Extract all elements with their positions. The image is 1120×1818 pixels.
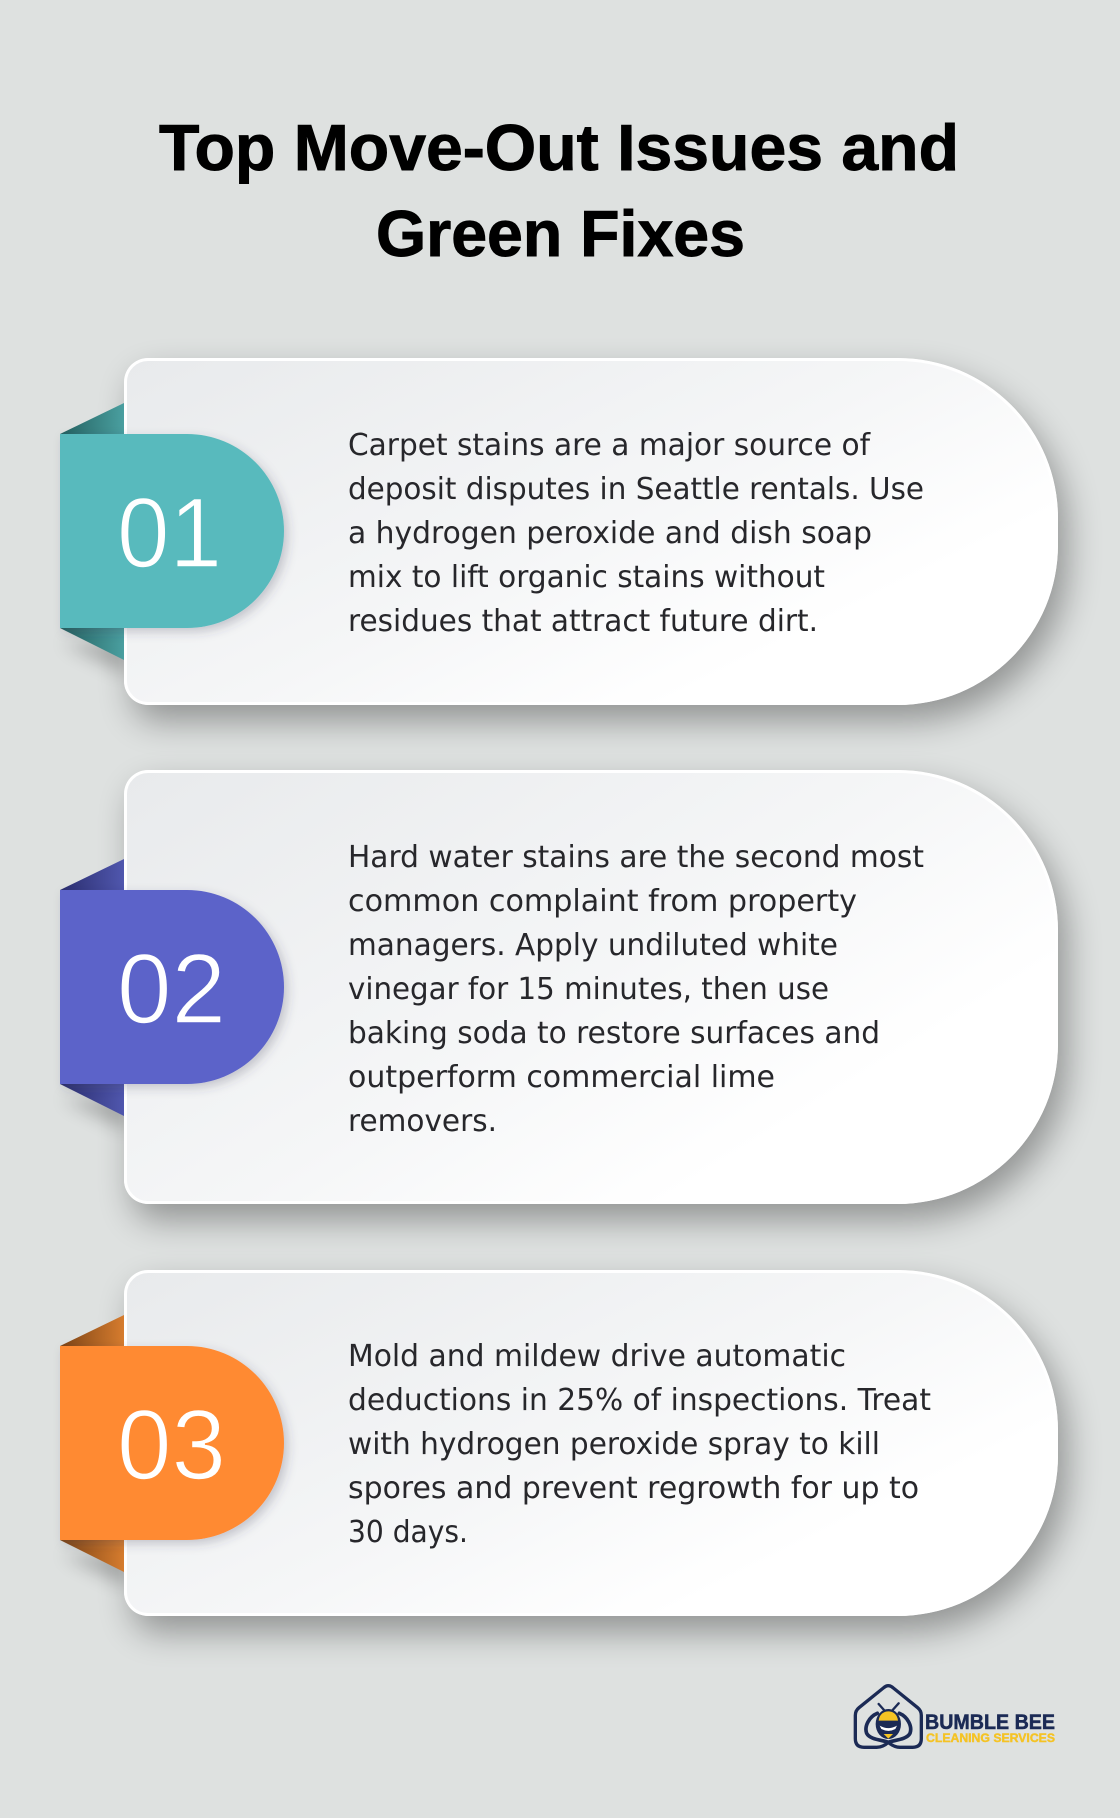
text: step 01 description: deposit disputes in Seattle rentals. Use: [348, 472, 924, 507]
text: step 02 description: outperform commercial lime: [348, 1060, 775, 1095]
ribbon fold bottom: step 01: [60, 628, 124, 660]
text: step 02 description: removers.: [348, 1104, 497, 1139]
ribbon fold bottom: step 03: [60, 1540, 124, 1572]
logo tagline: CLEANING SERVICES: [926, 1733, 1055, 1745]
text: step 03 description: [348, 1339, 931, 1550]
ribbon fold top: step 01: [60, 403, 124, 434]
title: Top Move-Out Issues and: [159, 111, 959, 184]
badge: 01: [60, 434, 284, 628]
ribbon fold top: step 02: [60, 859, 124, 890]
text: step 02 description: vinegar for 15 minutes, then use: [348, 972, 829, 1007]
title: [159, 111, 959, 270]
text: step 01 description: a hydrogen peroxide and dish soap: [348, 516, 872, 551]
text: step 01 description: Carpet stains are a major source of: [348, 428, 871, 463]
badge: 02: [60, 890, 284, 1084]
panel: step 02 hard water stains: [60, 770, 1067, 1220]
ribbon fold top: step 03: [60, 1315, 124, 1346]
badge: 03: 03: [117, 1389, 226, 1500]
icon: house with bee: [855, 1686, 921, 1747]
text: step 01 description: [348, 428, 924, 639]
title: Green Fixes: [376, 197, 745, 270]
text: step 02 description: managers. Apply undiluted white: [348, 928, 838, 963]
card: step 03: [124, 1270, 1058, 1616]
badge: 03: [60, 1346, 284, 1540]
text: step 03 description: deductions in 25% of inspections. Treat: [348, 1383, 931, 1418]
text: step 03 description: 30 days.: [348, 1515, 468, 1550]
panel: step 01 carpet stains: [60, 358, 1067, 721]
text: step 02 description: baking soda to restore surfaces and: [348, 1016, 880, 1051]
text: step 01 description: residues that attract future dirt.: [348, 604, 818, 639]
text: step 02 description: Hard water stains are the second most: [348, 840, 924, 875]
text: step 01 description: mix to lift organic stains without: [348, 560, 825, 595]
panel: step 03 mold and mildew: [60, 1270, 1067, 1632]
text: step 02 description: common complaint from property: [348, 884, 857, 919]
text: step 03 description: spores and prevent regrowth for up to: [348, 1471, 919, 1506]
text: step 03 description: with hydrogen peroxide spray to kill: [348, 1427, 880, 1462]
text: step 03 description: Mold and mildew drive automatic: [348, 1339, 846, 1374]
text: step 02 description: [348, 840, 924, 1139]
card: step 01: [124, 358, 1058, 705]
logo wordmark: BUMBLE BEE: [925, 1711, 1055, 1734]
badge: 02: 02: [117, 933, 226, 1044]
card: step 02: [124, 770, 1058, 1204]
logo: Bumble Bee Cleaning Services: [855, 1686, 1055, 1747]
ribbon fold bottom: step 02: [60, 1084, 124, 1116]
badge: 01: 01: [117, 477, 222, 588]
